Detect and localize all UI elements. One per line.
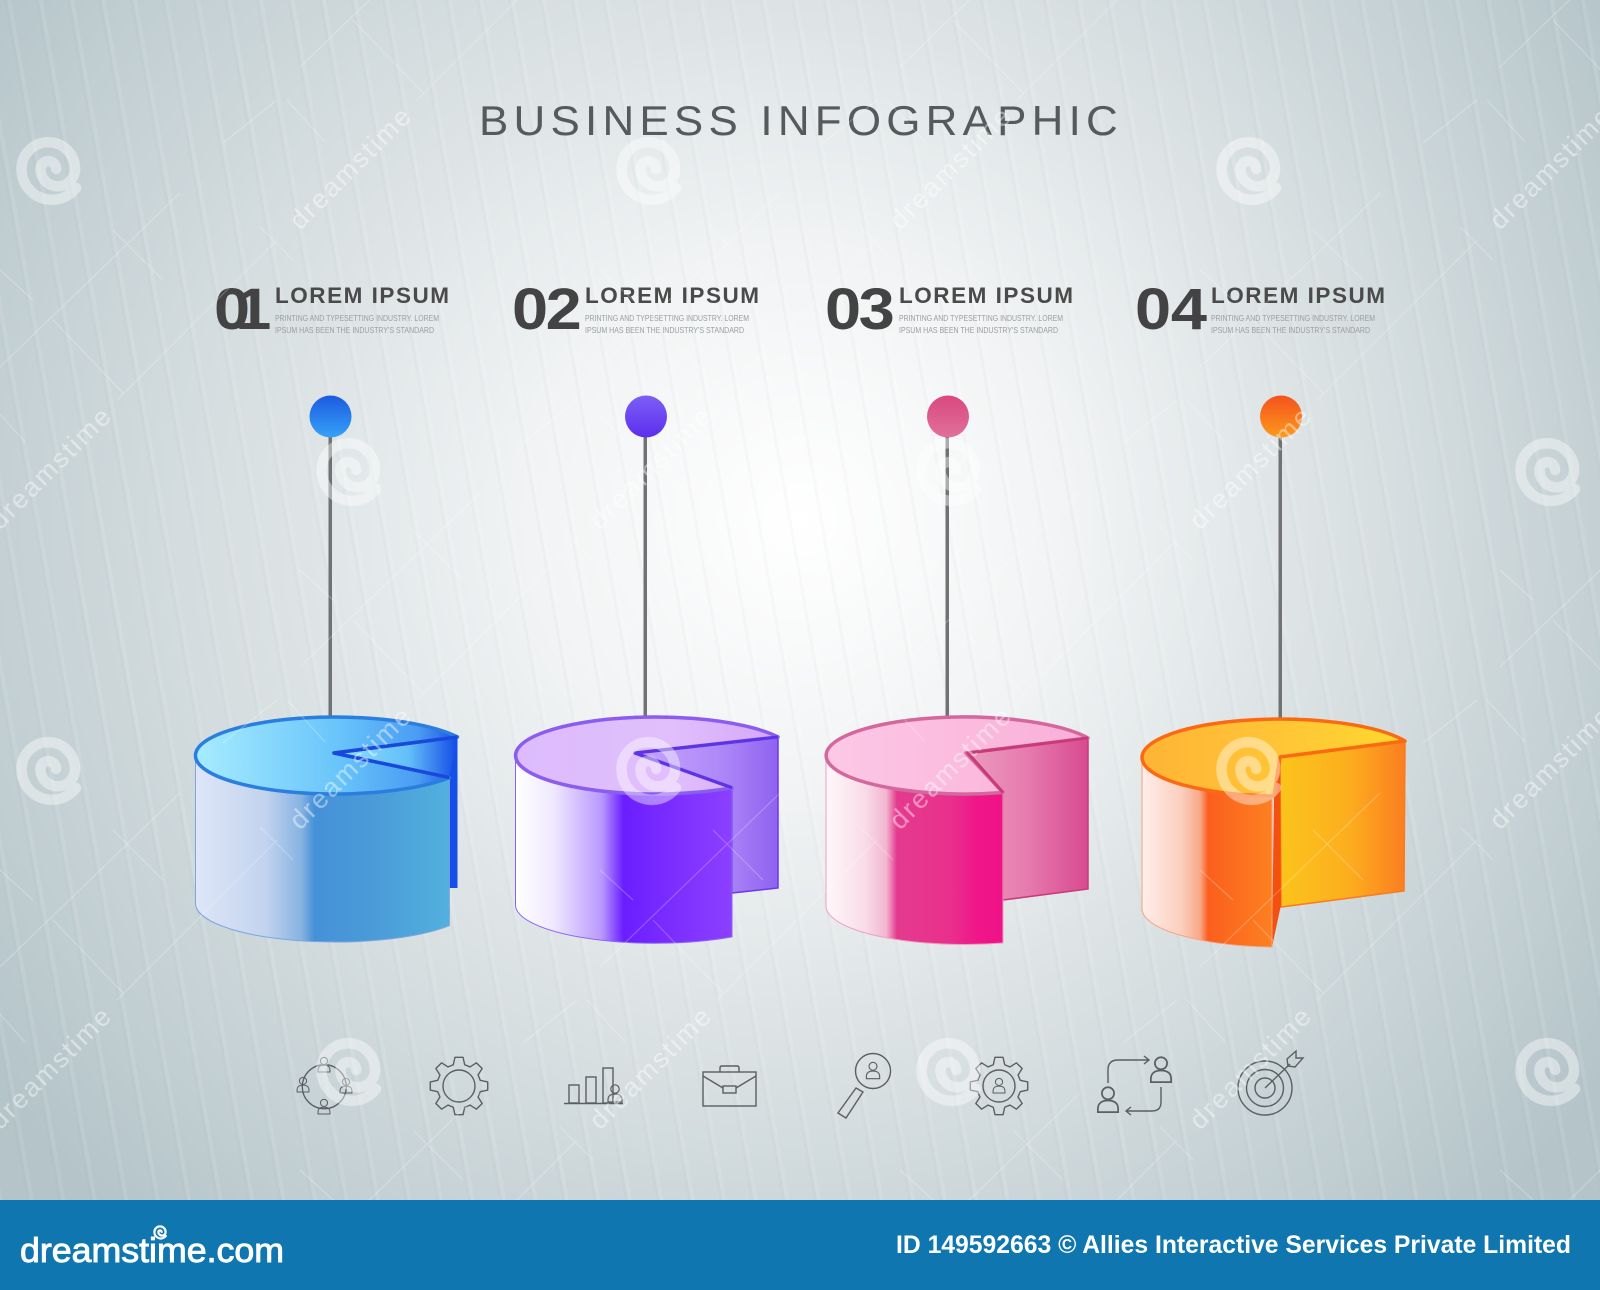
pin 1: blue marker and stem	[310, 396, 352, 718]
icon: people exchange arrows	[1098, 1056, 1171, 1115]
text: dreamstime	[1183, 1000, 1318, 1135]
pin 3: pink marker and stem	[927, 396, 969, 718]
icon: gear	[430, 1057, 488, 1115]
step 02 heading: LOREM IPSUM	[585, 283, 759, 308]
step 01 heading: 01	[214, 277, 271, 342]
step 02 heading	[512, 277, 759, 342]
icon: briefcase	[703, 1066, 756, 1106]
step 04 heading: IPSUM HAS BEEN THE INDUSTRY'S STANDARD	[1211, 325, 1370, 335]
step 04 heading: PRINTING AND TYPESETTING INDUSTRY. LOREM	[1211, 313, 1375, 323]
step 03 heading: LOREM IPSUM	[899, 283, 1073, 308]
pie 3: pink cylinder	[826, 717, 1088, 945]
text: dreamstime	[1183, 400, 1318, 535]
step 02 heading: 02	[512, 277, 582, 342]
footer band	[0, 1200, 1600, 1290]
step 03 heading: IPSUM HAS BEEN THE INDUSTRY'S STANDARD	[899, 325, 1058, 335]
step 04 heading: LOREM IPSUM	[1211, 283, 1385, 308]
footer credit: ID 149592663 © Allies Interactive Services Private Limited	[896, 1231, 1571, 1259]
text: dreamstime	[883, 700, 1018, 835]
step 01 heading: LOREM IPSUM	[275, 283, 449, 308]
pie 1: blue cylinder	[195, 717, 458, 942]
pin 4: orange marker and stem	[1260, 396, 1302, 720]
icon: target with arrow	[1238, 1051, 1303, 1115]
text: dreamstime	[583, 1000, 718, 1135]
icon: gear with person	[970, 1057, 1028, 1115]
text: dreamstime	[283, 100, 418, 235]
step 03 heading: 03	[825, 277, 895, 342]
step 03 heading: PRINTING AND TYPESETTING INDUSTRY. LOREM	[899, 313, 1063, 323]
pie 2: violet cylinder	[515, 717, 778, 943]
step 03 heading	[825, 277, 1073, 342]
title: BUSINESS INFOGRAPHIC	[479, 97, 1123, 144]
text: dreamstime	[583, 400, 718, 535]
step 01 heading: PRINTING AND TYPESETTING INDUSTRY. LOREM	[275, 313, 439, 323]
footer logo: dreamstime.com	[20, 1232, 284, 1270]
step 01 heading: IPSUM HAS BEEN THE INDUSTRY'S STANDARD	[275, 325, 434, 335]
pin 2: violet marker and stem	[625, 396, 667, 718]
icon: magnifier with person	[838, 1054, 890, 1118]
step 02 heading: IPSUM HAS BEEN THE INDUSTRY'S STANDARD	[585, 325, 744, 335]
text: dreamstime	[883, 100, 1018, 235]
pie 4: orange cylinder	[1142, 719, 1405, 947]
step 01 heading	[214, 277, 449, 342]
text: dreamstime	[283, 700, 418, 835]
icon: bar chart with person	[564, 1068, 623, 1104]
step 04 heading	[1135, 277, 1385, 342]
step 04 heading: 04	[1135, 277, 1207, 342]
icon: people circle	[297, 1057, 352, 1114]
step 02 heading: PRINTING AND TYPESETTING INDUSTRY. LOREM	[585, 313, 749, 323]
